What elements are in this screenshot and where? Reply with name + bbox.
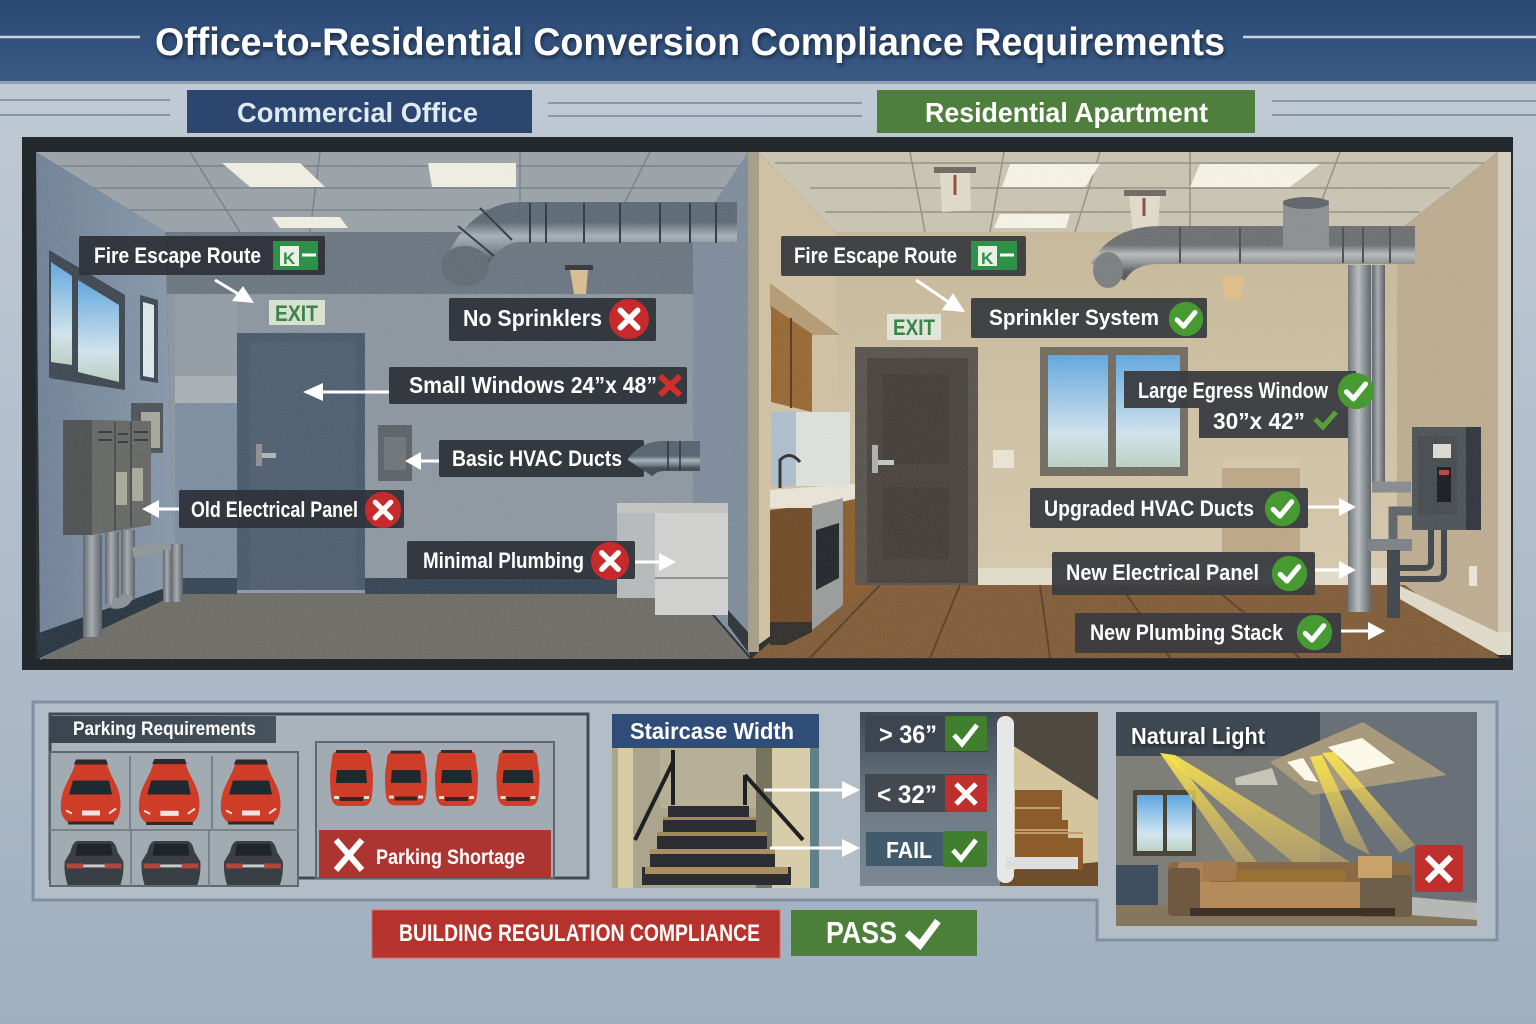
panel: staircase width bbox=[612, 714, 860, 888]
callout: No Sprinklers bbox=[449, 298, 656, 341]
room frame bbox=[22, 137, 1513, 670]
arrow bbox=[1315, 568, 1340, 572]
banner: building regulation compliance: BUILDING REGULATION COMPLIANCE bbox=[399, 920, 760, 947]
callout: Fire Escape Route (apartment): Fire Escape Route bbox=[794, 243, 957, 268]
icon: small breaker box bbox=[378, 425, 412, 481]
banner: building regulation compliance bbox=[372, 910, 780, 958]
carpet floor bbox=[40, 593, 750, 659]
left wall bbox=[36, 152, 175, 660]
heading: Parking Requirements bbox=[50, 716, 276, 743]
title: Office-to-Residential Conversion Compliance Requirements bbox=[155, 21, 1225, 64]
icon: duct bbox=[441, 203, 737, 286]
wooden stair bbox=[1015, 790, 1083, 870]
callout: Sprinkler System bbox=[971, 298, 1207, 338]
icon: upgraded ducts bbox=[1093, 197, 1415, 612]
right wall bbox=[693, 152, 750, 656]
icon: red x bbox=[1415, 845, 1463, 892]
callout: Fire Escape Route (apartment): K bbox=[981, 249, 994, 268]
callout: Fire Escape Route (office) bbox=[79, 236, 325, 303]
icon: small duct bbox=[640, 441, 700, 471]
icon: old electrical panel and pipes bbox=[63, 403, 183, 637]
title banner bbox=[0, 0, 1536, 84]
heading: Residential Apartment: Residential Apartment bbox=[925, 97, 1208, 128]
label: FAIL bbox=[866, 831, 987, 867]
callout: Basic HVAC Ducts bbox=[405, 440, 700, 477]
icon: plumbing units bbox=[617, 503, 728, 615]
panel: natural light bbox=[1116, 712, 1477, 926]
arrow bbox=[635, 560, 660, 564]
callout: Parking Shortage: Parking Shortage bbox=[376, 846, 525, 869]
callout: Small Windows bbox=[303, 367, 687, 404]
callout: Old Electrical Panel: Old Electrical Panel bbox=[191, 497, 358, 522]
panel: staircase measurements bbox=[860, 712, 1098, 886]
wall texture bbox=[36, 152, 1511, 659]
left wall bbox=[758, 152, 840, 645]
arrow bbox=[322, 390, 389, 394]
banner: pass: PASS bbox=[826, 915, 897, 950]
heading: Natural Light: Natural Light bbox=[1131, 723, 1265, 749]
callout: Minimal Plumbing bbox=[407, 541, 676, 580]
callout: Upgraded HVAC Ducts bbox=[1030, 488, 1356, 528]
heading: Commercial Office: Commercial Office bbox=[237, 97, 478, 128]
panel: parking requirements bbox=[50, 714, 588, 886]
heading: Parking Requirements: Parking Requirements bbox=[73, 719, 256, 740]
callout: Large Egress Window: Large Egress Window bbox=[1138, 378, 1329, 403]
heading: Commercial Office bbox=[187, 90, 532, 133]
heading: Staircase Width: Staircase Width bbox=[630, 718, 794, 744]
callout: Upgraded HVAC Ducts: Upgraded HVAC Ducts bbox=[1044, 496, 1254, 521]
back wall bbox=[165, 232, 700, 595]
baseboards bbox=[36, 578, 750, 658]
window bbox=[1133, 790, 1196, 856]
sofa bbox=[1168, 856, 1412, 917]
light beams bbox=[1160, 752, 1415, 868]
callout: New Electrical Panel bbox=[1052, 552, 1356, 595]
callout: Large Egress Window: 30”x 42” bbox=[1213, 408, 1305, 434]
callout: Old Electrical Panel bbox=[142, 490, 404, 528]
panel: residential apartment room bbox=[752, 152, 1511, 658]
arrow bbox=[215, 280, 240, 295]
icon: wall lamp bbox=[565, 265, 593, 294]
arrow bbox=[1308, 506, 1340, 508]
callout: Large Egress Window bbox=[1124, 371, 1374, 438]
ceiling bbox=[36, 152, 748, 232]
parking lot: shortage bbox=[316, 742, 554, 878]
arrow bbox=[158, 508, 179, 510]
arrow bbox=[1341, 630, 1368, 632]
callout: Parking Shortage bbox=[319, 830, 551, 878]
skylight bbox=[1235, 722, 1447, 795]
exit sign: EXIT bbox=[893, 315, 935, 340]
label: FAIL: FAIL bbox=[886, 837, 932, 863]
label: < 32" bbox=[865, 774, 987, 812]
door bbox=[237, 333, 365, 590]
banner: pass bbox=[791, 910, 977, 956]
label: > 36" bbox=[865, 716, 987, 752]
wood floor bbox=[752, 585, 1500, 658]
callout: Sprinkler System: Sprinkler System bbox=[989, 305, 1159, 330]
callout: Fire Escape Route (office): K bbox=[283, 249, 296, 268]
back wall bbox=[835, 232, 1397, 590]
label: > 36": > 36” bbox=[879, 721, 937, 749]
exit sign: EXIT bbox=[275, 301, 318, 326]
kitchen bbox=[770, 283, 869, 645]
callout: New Electrical Panel: New Electrical Panel bbox=[1066, 560, 1259, 585]
light switch bbox=[993, 450, 1014, 468]
callout: Basic HVAC Ducts: Basic HVAC Ducts bbox=[452, 446, 622, 471]
windows bbox=[49, 250, 158, 390]
stairs bbox=[635, 750, 803, 885]
panel: commercial office room bbox=[36, 152, 750, 660]
arrow bbox=[420, 460, 439, 462]
callout: No Sprinklers: No Sprinklers bbox=[463, 305, 602, 331]
lower section outline bbox=[33, 702, 1497, 940]
heading: Staircase Width bbox=[612, 714, 819, 748]
window bbox=[1040, 347, 1188, 476]
arrow bbox=[916, 280, 950, 303]
label: < 32": < 32” bbox=[877, 781, 937, 809]
ceiling bbox=[758, 152, 1498, 232]
icon: appliance bbox=[1222, 458, 1300, 560]
icon: new electrical panel and pipes bbox=[1368, 427, 1481, 618]
callout: New Plumbing Stack bbox=[1075, 613, 1385, 653]
right wall bbox=[1397, 152, 1498, 655]
callout: Minimal Plumbing: Minimal Plumbing bbox=[423, 548, 584, 573]
callout: Fire Escape Route (office): Fire Escape Route bbox=[94, 243, 261, 268]
callout: Small Windows: Small Windows 24”x 48” bbox=[409, 372, 657, 398]
icon: ceiling lights bbox=[934, 167, 1244, 300]
white pipe bbox=[997, 716, 1078, 883]
door bbox=[855, 347, 978, 585]
divider between rooms bbox=[748, 152, 759, 652]
arrows bbox=[764, 781, 860, 857]
parking lot: compliant bbox=[50, 752, 298, 886]
callout: New Plumbing Stack: New Plumbing Stack bbox=[1090, 620, 1284, 645]
heading: Residential Apartment bbox=[877, 90, 1255, 133]
callout: Fire Escape Route (apartment) bbox=[781, 236, 1026, 312]
